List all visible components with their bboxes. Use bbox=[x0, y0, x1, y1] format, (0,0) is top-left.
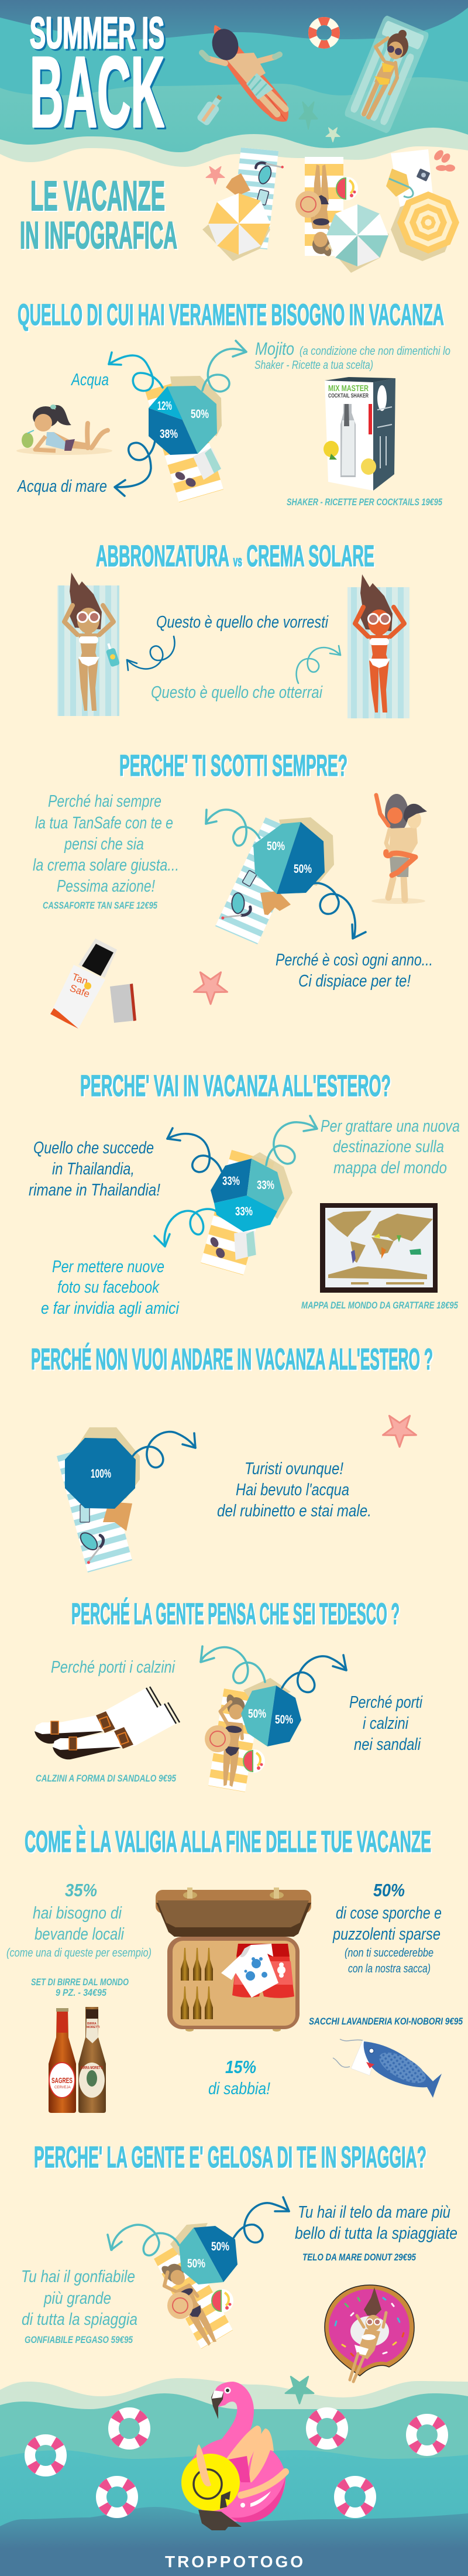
text: socks in sandals bbox=[349, 1693, 423, 1754]
text: biggest inflatable: Tu hai il gonfiabile bbox=[21, 2267, 135, 2286]
arrow to inflatable text bbox=[108, 2225, 179, 2255]
product image: beer bottles bbox=[49, 2007, 106, 2113]
text: biggest inflatable: GONFIABILE PEGASO 59€95 bbox=[25, 2335, 133, 2345]
panel: why not go abroad bbox=[57, 1416, 417, 1573]
product image: tan safe: Safe bbox=[68, 982, 91, 1000]
icon: umbrella shadow bbox=[228, 1152, 292, 1219]
pie chart: 33 33 33: 33% bbox=[257, 1179, 274, 1192]
icon: woman on yellow towel bbox=[154, 2223, 233, 2351]
text: 50 percent dirty things: 50% bbox=[373, 1880, 405, 1900]
pie chart: 50 50 bbox=[179, 2226, 238, 2284]
pie chart: 50 50: 50% bbox=[294, 862, 312, 876]
pie chart: 33 33 33: 33% bbox=[222, 1174, 240, 1188]
icon: open suitcase bbox=[156, 1888, 311, 2032]
pie chart: 50 50: 50% bbox=[187, 2257, 205, 2270]
text: because you wear socks: Perché porti i calzini bbox=[51, 1658, 176, 1677]
text: facebook reason bbox=[41, 1258, 180, 1318]
text: what you would want: Questo è quello che vorresti bbox=[156, 613, 329, 632]
text: reason one: Pessima azione! bbox=[57, 877, 155, 896]
arrow to sandals text bbox=[282, 1655, 346, 1692]
subtitle: Le vacanze in infografica: IN INFOGRAFICA bbox=[20, 214, 177, 256]
icon: yellow beach umbrella bbox=[202, 193, 270, 261]
icon: teal towel with beach items bbox=[214, 817, 308, 944]
text: tourists everywhere: Hai bevuto l'acqua bbox=[236, 1481, 349, 1499]
icon: umbrella shadow bbox=[70, 1427, 140, 1499]
text: Mojito note: Shaker - Ricette a tua scelta) bbox=[254, 359, 373, 372]
text: 50 percent dirty things: puzzolenti sparse bbox=[332, 1925, 441, 1944]
title: Summer is back: SUMMER IS bbox=[30, 8, 164, 57]
footer logo: Troppotogo: TROPPOTOGO bbox=[165, 2553, 303, 2571]
text: 15 percent sand: 15% bbox=[225, 2057, 256, 2077]
text: reason one: la crema solare giusta... bbox=[33, 856, 179, 875]
text: scratch map reason bbox=[321, 1117, 460, 1177]
icon: message in a bottle bbox=[196, 92, 226, 126]
text: tourists everywhere bbox=[217, 1460, 371, 1520]
pie chart: 50 38 12: 50% bbox=[191, 407, 209, 421]
text: socks in sandals: Perché porti bbox=[349, 1693, 423, 1712]
pie chart: 100 percent: 100% bbox=[91, 1467, 111, 1481]
pie chart: 50 38 12: 12% bbox=[157, 399, 172, 413]
product image: beer bottles: SAGRES bbox=[51, 2076, 73, 2085]
text: 15 percent sand: di sabbia! bbox=[208, 2080, 270, 2098]
header: sea waves and shore bbox=[0, 0, 468, 275]
text: Mojito note: Mojito bbox=[255, 338, 294, 359]
text: scratch map reason: mappa del mondo bbox=[333, 1159, 447, 1177]
icon: girl with coconut drink bbox=[16, 405, 112, 455]
product image: cocktail shaker box: MIX MASTER bbox=[328, 383, 369, 393]
pie chart: 50 50 bbox=[241, 1686, 301, 1746]
icon: striped concentric beach umbrella bbox=[391, 191, 459, 261]
icon: pale starfish in water bbox=[326, 128, 340, 142]
text: reason one: la tua TanSafe con te e bbox=[35, 814, 173, 833]
beer bottles in suitcase bbox=[181, 1948, 213, 2019]
text: socks in sandals: nei sandali bbox=[354, 1735, 421, 1754]
pie chart: 50 50: 50% bbox=[248, 1707, 266, 1721]
arrow to map text bbox=[266, 1116, 317, 1165]
text: reason two: Perché è così ogni anno... bbox=[276, 951, 433, 970]
arrow to reason one bbox=[206, 810, 260, 845]
text: reason one bbox=[33, 792, 179, 896]
panel: suitcase bbox=[6, 1880, 463, 2113]
pie chart: 100 percent bbox=[65, 1438, 136, 1509]
icon: life ring red bbox=[312, 21, 336, 44]
text: reason two: Ci dispiace per te! bbox=[298, 972, 411, 991]
panel: why go abroad bbox=[29, 1116, 460, 1318]
arrow to towel text bbox=[233, 2197, 289, 2242]
text: Thailand reason: Quello che succede bbox=[33, 1139, 154, 1157]
text: socks in sandals: i calzini bbox=[363, 1714, 409, 1733]
text: 15 percent sand bbox=[208, 2057, 270, 2098]
icon: woman on air mattress bbox=[343, 15, 430, 134]
text: reason two bbox=[276, 951, 433, 991]
arrow to Mojito bbox=[202, 341, 246, 392]
panel: socks and sandals bbox=[35, 1646, 423, 1792]
panel: tan vs sunscreen bbox=[57, 573, 410, 718]
text: biggest inflatable: di tutta la spiaggia bbox=[22, 2310, 137, 2329]
arrow to Thailand text bbox=[167, 1128, 222, 1172]
text: scratch map reason: destinazione sulla bbox=[333, 1138, 444, 1156]
arrow to reason two bbox=[314, 883, 366, 938]
product image: beer bottles: BIRRA bbox=[87, 2022, 97, 2026]
text: facebook reason: Per mettere nuove bbox=[52, 1258, 164, 1276]
text: Thailand reason: rimane in Thailandia! bbox=[29, 1181, 160, 1200]
icon: woman on pink flamingo float bbox=[181, 2382, 285, 2530]
product image: beer bottles: MORETTI bbox=[87, 2026, 100, 2029]
icon: couple piggyback bbox=[371, 794, 427, 904]
text: facebook reason: e far invidia agli amici bbox=[41, 1299, 180, 1318]
text: reason one: Perché hai sempre bbox=[48, 792, 161, 811]
product image: sandal socks bbox=[35, 1687, 180, 1759]
text: 35 percent drinks: 9 PZ. - 34€95 bbox=[56, 1988, 107, 1998]
icon: starfish bbox=[194, 972, 227, 1004]
icon: woman on yellow towel bbox=[205, 1678, 291, 1792]
panel: why you always burn bbox=[33, 792, 433, 1029]
text: 50 percent dirty things bbox=[309, 1880, 463, 2027]
dirty white t-shirt bbox=[221, 1944, 285, 1998]
product image: beer bottles: CERVEJA bbox=[54, 2086, 71, 2089]
text: 35 percent drinks: 35% bbox=[65, 1880, 97, 1900]
icon: umbrella shadow bbox=[170, 376, 222, 436]
text: 50 percent dirty things: (non ti succederebbe bbox=[345, 1947, 433, 1960]
arrow to tourists text bbox=[133, 1432, 195, 1468]
icon: sunburnt woman on striped towel bbox=[347, 574, 410, 718]
icon: umbrella shadow bbox=[279, 817, 334, 886]
price label: tan safe: CASSAFORTE TAN SAFE 12€95 bbox=[43, 900, 158, 911]
icon: surfer on orange surfboard bbox=[202, 25, 288, 122]
text: facebook reason: foto su facebook bbox=[57, 1278, 160, 1297]
title: Summer is back bbox=[30, 8, 164, 148]
product image: scratch world map bbox=[320, 1203, 438, 1293]
icon: tanned woman on striped towel bbox=[57, 573, 120, 716]
text: tourists everywhere: del rubinetto e stai male. bbox=[217, 1502, 371, 1520]
text: 35 percent drinks: bevande locali bbox=[35, 1925, 125, 1944]
text: Thailand reason: in Thailandia, bbox=[52, 1160, 135, 1179]
pie chart: 50 50: 50% bbox=[267, 840, 285, 853]
arrow to socks text bbox=[201, 1646, 265, 1683]
pie chart: 50 50 bbox=[253, 822, 325, 894]
pie chart: 33 33 33 bbox=[211, 1159, 284, 1232]
panel: jealous people bbox=[21, 2197, 457, 2351]
icon: teal towel with beach items bbox=[57, 1444, 132, 1573]
text: 35 percent drinks: (come una di queste per esempio) bbox=[6, 1947, 152, 1960]
text: biggest inflatable: più grande bbox=[43, 2289, 111, 2308]
icon: teal starfish in water bbox=[299, 102, 318, 129]
pie chart: 50 38 12: 38% bbox=[160, 427, 178, 441]
product image: beer bottles: BIRRA MORETTI bbox=[81, 2066, 103, 2070]
pie chart: 50 50: 50% bbox=[275, 1713, 293, 1727]
icon: white towel with bag, camera and flip flops bbox=[386, 148, 455, 234]
text: Acqua: Acqua bbox=[70, 371, 109, 389]
pie chart: 50 50: 50% bbox=[211, 2240, 229, 2253]
icon: starfish on sand bbox=[206, 167, 225, 184]
text: 35 percent drinks bbox=[6, 1880, 152, 1998]
icon: teal beach umbrella bbox=[326, 204, 389, 273]
text: Acqua di mare: Acqua di mare bbox=[16, 477, 107, 496]
icon: life rings pink bbox=[30, 2413, 443, 2513]
icon: teal starfish bbox=[285, 2376, 314, 2404]
text: best towel: TELO DA MARE DONUT 29€95 bbox=[302, 2252, 417, 2263]
text: Thailand reason bbox=[29, 1139, 160, 1200]
product image: cocktail shaker box bbox=[324, 377, 395, 491]
pie chart: 50 38 12 bbox=[149, 386, 217, 455]
icon: yellow towel with book and sunglasses bbox=[145, 378, 223, 502]
text: 35 percent drinks: hai bisogno di bbox=[33, 1904, 122, 1923]
product image: tan safe bbox=[50, 938, 136, 1029]
product image: donut beach towel with woman bbox=[325, 2285, 414, 2382]
text: 50 percent dirty things: con la nostra sacca) bbox=[348, 1962, 431, 1975]
icon: woman sunbathing on yellow towel bbox=[295, 157, 358, 256]
text: what you will get: Questo è quello che otterrai bbox=[151, 683, 323, 702]
price label: socks: CALZINI A FORMA DI SANDALO 9€95 bbox=[36, 1773, 177, 1784]
text: best towel bbox=[295, 2203, 457, 2263]
product image: tan safe: Tan bbox=[71, 971, 90, 987]
red swim shorts bbox=[232, 1944, 294, 1998]
text: reason one: pensi che sia bbox=[64, 835, 144, 854]
icon: striped towel with snorkel, shorts and phone bbox=[226, 148, 286, 249]
arrow to Acqua bbox=[109, 352, 163, 391]
arrow to facebook text bbox=[154, 1209, 216, 1246]
arrow to Acqua di mare bbox=[115, 441, 155, 496]
text: biggest inflatable bbox=[21, 2267, 137, 2345]
text: BACK bbox=[30, 36, 164, 148]
icon: yellow towel with book and sunglasses bbox=[201, 1150, 274, 1275]
subtitle: Le vacanze in infografica bbox=[20, 173, 177, 256]
arrow to tanned woman bbox=[127, 636, 174, 670]
panel: what you really need bbox=[16, 338, 450, 508]
product image: cocktail shaker box: COCKTAIL SHAKER bbox=[328, 393, 369, 399]
icon: starfish bbox=[383, 1416, 417, 1447]
text: tourists everywhere: Turisti ovunque! bbox=[245, 1460, 343, 1478]
product image: koi laundry bag bbox=[333, 2039, 442, 2098]
pie chart: 33 33 33: 33% bbox=[235, 1205, 253, 1218]
text: Mojito note bbox=[254, 338, 450, 372]
footer: sea waves bbox=[0, 2378, 468, 2576]
arrow to burnt woman bbox=[297, 646, 340, 683]
text: 50 percent dirty things: di cose sporche e bbox=[336, 1904, 442, 1923]
text: 35 percent drinks: SET DI BIRRE DAL MONDO bbox=[31, 1977, 129, 1988]
subtitle: Le vacanze in infografica: LE VACANZE bbox=[30, 173, 165, 220]
